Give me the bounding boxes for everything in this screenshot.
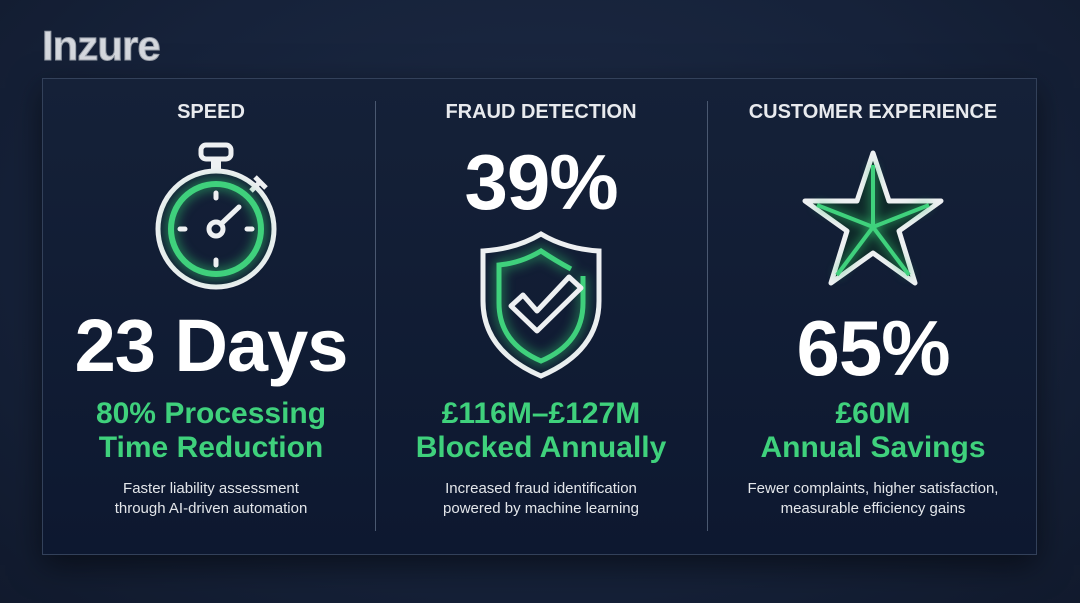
icon: stopwatch: [156, 142, 276, 290]
green stat: [416, 397, 666, 464]
description: Faster liability assessment: [123, 480, 299, 497]
description: measurable efficiency gains: [781, 500, 965, 517]
column: fraud detection: [416, 101, 666, 517]
green stat: Annual Savings: [760, 431, 986, 464]
stat: 65%: 65%: [796, 304, 950, 392]
column: speed: [75, 101, 347, 517]
description: [443, 480, 639, 517]
heading: speed: SPEED: [177, 101, 245, 123]
green stat: Time Reduction: [99, 431, 323, 464]
logo: Inzure: [42, 22, 160, 69]
description: powered by machine learning: [443, 500, 639, 517]
icon: shield: [480, 231, 602, 379]
icon: star: [802, 150, 944, 286]
heading: customer experience: CUSTOMER EXPERIENCE: [749, 101, 997, 123]
green stat: Blocked Annually: [416, 431, 666, 464]
green stat: 80% Processing: [96, 397, 326, 430]
description: Fewer complaints, higher satisfaction,: [748, 480, 998, 497]
description: [114, 480, 307, 517]
stat: 23 days: 23 Days: [75, 304, 347, 387]
green stat: £116M–£127M: [442, 397, 640, 430]
description: [748, 480, 998, 517]
green stat: [96, 397, 326, 464]
panel: main: [42, 78, 1037, 555]
column: customer experience: [748, 101, 998, 517]
heading: fraud: FRAUD DETECTION: [445, 101, 637, 123]
description: Increased fraud identification: [445, 480, 637, 497]
green stat: £60M: [835, 397, 911, 430]
description: through AI-driven automation: [115, 500, 307, 517]
stat: 39%: 39%: [464, 138, 618, 226]
green stat: [760, 397, 986, 464]
